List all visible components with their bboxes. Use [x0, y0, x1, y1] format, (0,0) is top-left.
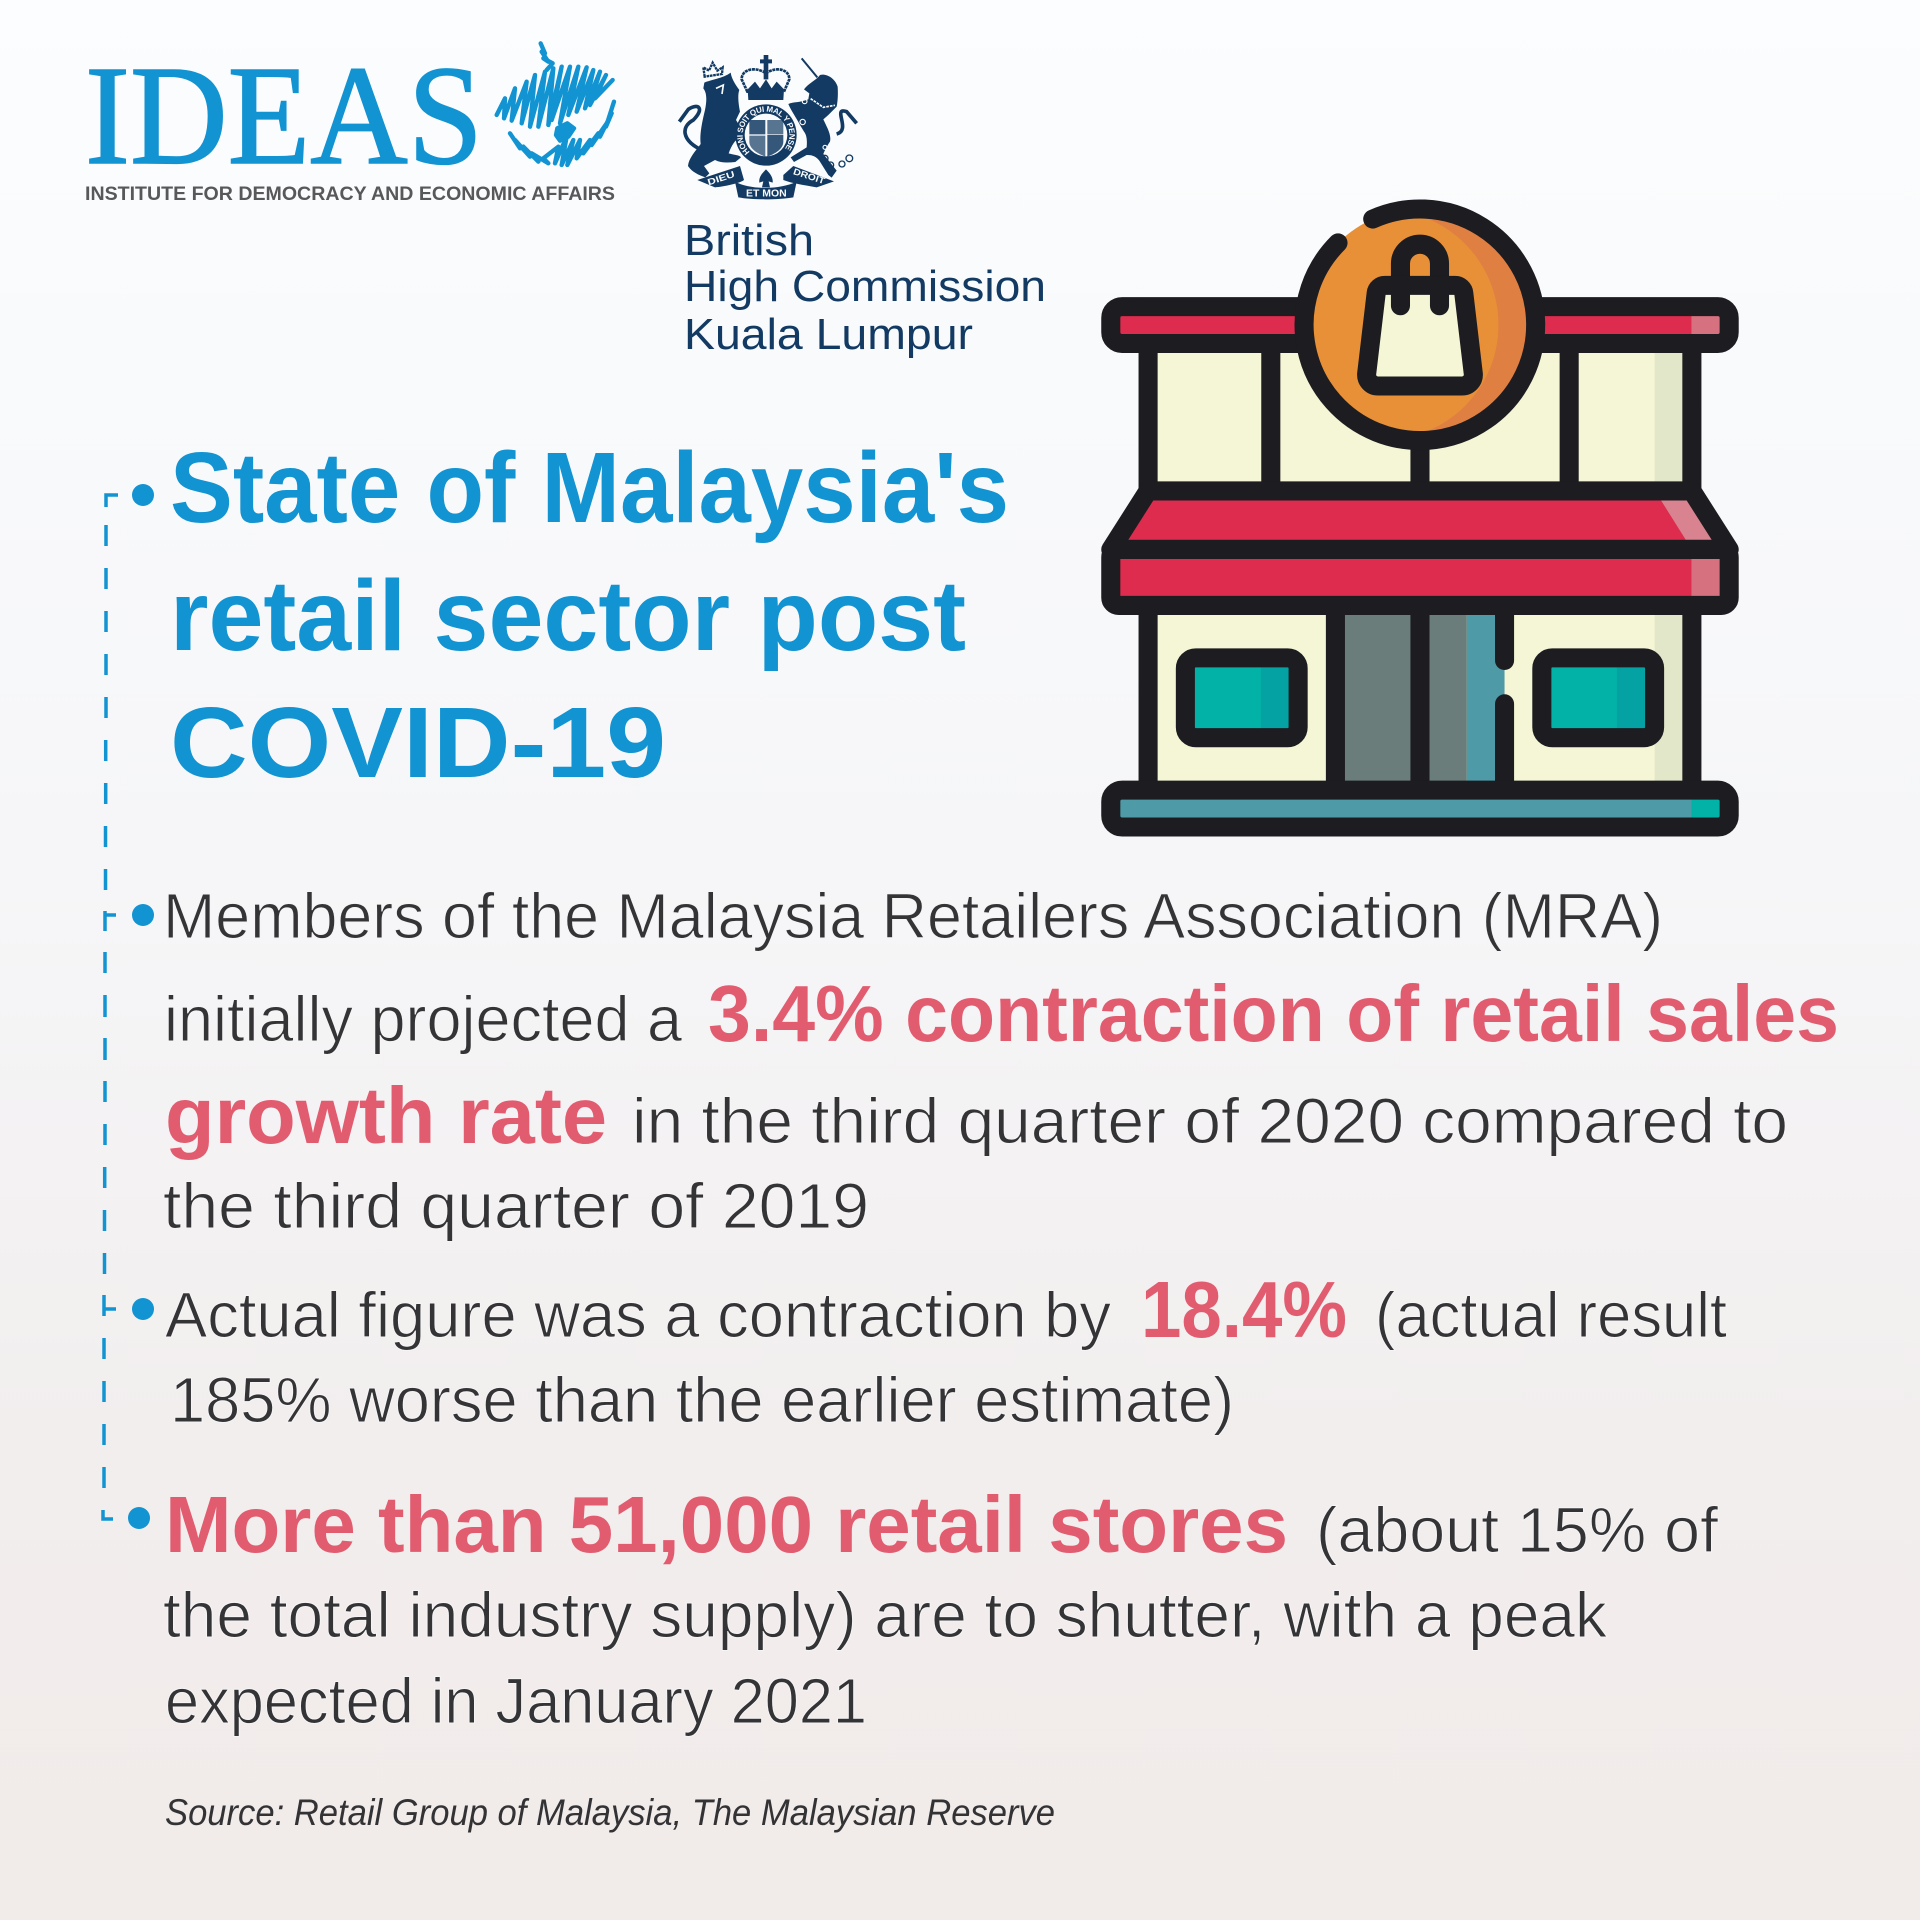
text: MRA projection: growth rate	[165, 1071, 607, 1160]
motto ribbons	[697, 166, 744, 187]
icon: royal coat of arms: ET MON	[746, 189, 787, 200]
logo: British High Commission	[678, 55, 1046, 359]
bullet point 1 marker	[132, 904, 154, 926]
round sign	[1269, 209, 1536, 441]
awning	[1111, 491, 1729, 605]
cornice	[1111, 307, 1729, 343]
title	[170, 432, 1009, 799]
text: actual figure: 185% worse than the earlier estimate)	[170, 1364, 1234, 1436]
upper wall	[1148, 343, 1692, 491]
text: store closures: (about 15% of	[1316, 1494, 1718, 1566]
dashed timeline connector	[103, 495, 118, 1519]
icon: shopping bag	[1367, 244, 1473, 386]
title: COVID-19	[170, 687, 666, 799]
text: actual figure	[165, 1265, 1727, 1436]
text: MRA projection: Members of the Malaysia Retailers Association (MRA)	[163, 880, 1663, 952]
text: MRA projection: in the third quarter of 2020 compared to	[632, 1085, 1788, 1157]
title bullet	[132, 484, 154, 506]
source note: Source: Retail Group of Malaysia, The Malaysian Reserve	[165, 1792, 1055, 1833]
text: MRA projection: initially projected a	[164, 983, 682, 1055]
base	[1111, 790, 1729, 827]
IDEAS full name: INSTITUTE FOR DEMOCRACY AND ECONOMIC AFFAIRS	[85, 184, 615, 205]
bullet point 3 marker	[128, 1507, 150, 1529]
garter and shield	[735, 104, 797, 166]
text: MRA projection	[163, 880, 1839, 1242]
bullet point 2 marker	[132, 1298, 154, 1320]
logo: IDEAS	[85, 36, 615, 205]
unicorn	[788, 75, 838, 178]
British High Commission name: Kuala Lumpur	[684, 310, 973, 359]
text: store closures: the total industry supply) are to shutter, with a peak	[163, 1579, 1608, 1651]
text: actual figure: Actual figure was a contraction by	[165, 1279, 1111, 1351]
text: store closures	[163, 1480, 1718, 1737]
text: MRA projection: 3.4% contraction of retail sales	[708, 969, 1839, 1058]
icon: royal coat of arms	[678, 55, 858, 200]
crown	[742, 69, 789, 92]
British High Commission name: British	[684, 216, 814, 265]
text: store closures: expected in January 2021	[165, 1665, 867, 1737]
lower wall and door	[1148, 605, 1692, 790]
right window	[1542, 658, 1655, 738]
icon: retail store with shopping bag sign	[1111, 209, 1729, 827]
lion	[688, 73, 744, 177]
text: MRA projection: the third quarter of 2019	[163, 1170, 869, 1242]
text: actual figure: (actual result	[1375, 1279, 1727, 1351]
title: retail sector post	[170, 560, 966, 672]
title: State of Malaysia's	[170, 432, 1009, 544]
icon: royal coat of arms: DROIT	[792, 166, 827, 186]
icon: IDEAS scribble bird	[497, 43, 614, 165]
text: store closures: More than 51,000 retail stores	[165, 1480, 1288, 1569]
British High Commission name: High Commission	[684, 262, 1046, 311]
British High Commission name	[684, 216, 1046, 359]
icon: royal coat of arms: DIEU	[706, 169, 736, 187]
left window	[1185, 658, 1298, 738]
icon: royal coat of arms: HONI SOIT QUI MAL Y PENSE	[737, 106, 795, 156]
IDEAS wordmark: IDEAS	[85, 36, 483, 194]
text: actual figure: 18.4%	[1141, 1265, 1347, 1354]
